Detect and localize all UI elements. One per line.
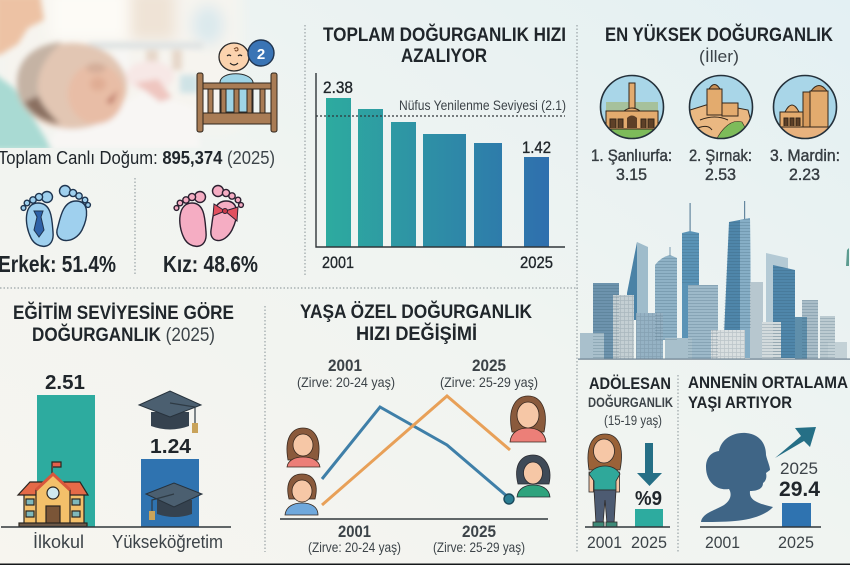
icon: Mardin xyxy=(774,76,837,140)
bar 2025 xyxy=(782,503,811,527)
text: total live births: Toplam Canlı Doğum: 895,374 (2025) xyxy=(0,148,275,168)
bottom labels: 2001 xyxy=(338,522,371,541)
icon: graduation cap on bar xyxy=(146,483,202,520)
text: female share: Kız: 48.6% xyxy=(163,251,258,277)
axis labels: 2001 xyxy=(587,533,622,552)
axis labels: 2025 xyxy=(631,533,667,552)
heading line two: YAŞI ARTIYOR xyxy=(688,393,792,412)
panel: highest fertility provinces xyxy=(591,23,840,184)
subheading: (İller) xyxy=(699,47,739,66)
value: 29.4 xyxy=(779,478,820,501)
province labels: 3.15 xyxy=(616,165,647,184)
axis labels: Yükseköğretim xyxy=(112,531,223,552)
icon: pink baby feet xyxy=(174,186,243,246)
top labels: 2025 xyxy=(472,356,506,375)
value labels: 2.51 xyxy=(45,372,85,394)
panel: adolescent fertility xyxy=(585,374,673,552)
age range: (15-19 yaş) xyxy=(604,413,662,428)
icon: school xyxy=(18,462,88,526)
value labels: 1.24 xyxy=(150,436,192,458)
province labels: 3. Mardin: xyxy=(770,146,840,165)
bar 2025 xyxy=(635,509,663,527)
province labels: 2. Şırnak: xyxy=(689,146,752,165)
heading: TOPLAM DOĞURGANLIK HIZI xyxy=(323,23,566,46)
value labels xyxy=(45,372,192,458)
icon: woman upper right xyxy=(510,396,546,442)
illustration: city skyline xyxy=(578,201,850,360)
value xyxy=(779,459,820,501)
top labels xyxy=(297,356,538,390)
axis labels xyxy=(705,533,814,552)
bottom labels: 2025 xyxy=(462,522,496,541)
bar chart: 1.42 xyxy=(522,138,551,157)
heading: YAŞA ÖZEL DOĞURGANLIK xyxy=(300,301,532,323)
icon: baby in crib with badge 2: 2 xyxy=(257,46,265,63)
subheading: DOĞURGANLIK xyxy=(588,395,673,410)
province labels: 1. Şanlıurfa: xyxy=(591,146,672,165)
axis labels: İlkokul xyxy=(33,531,84,552)
heading line two: AZALIYOR xyxy=(401,45,487,67)
bottom labels xyxy=(308,522,525,555)
bar chart: 2025 xyxy=(520,253,553,272)
axis labels: 2001 xyxy=(705,533,740,552)
heading line two: DOĞURGANLIK (2025) xyxy=(32,324,215,346)
text: male share: Erkek: 51.4% xyxy=(0,251,116,277)
bar chart xyxy=(316,73,566,272)
panel: fertility by education xyxy=(1,302,234,552)
top labels: (Zirve: 25-29 yaş) xyxy=(440,374,538,390)
axis labels xyxy=(587,533,667,552)
icon: blue baby feet xyxy=(21,186,90,246)
bar chart: 2001 xyxy=(322,253,354,272)
bottom labels: (Zirve: 20-24 yaş) xyxy=(308,539,401,555)
bar chart: Nüfus Yenilenme Seviyesi (2.1) xyxy=(399,98,566,113)
arrow: increase xyxy=(775,427,816,458)
icon: graduation cap xyxy=(139,391,201,433)
line chart xyxy=(280,396,548,519)
axis labels: 2025 xyxy=(778,533,814,552)
icon: Şanlıurfa xyxy=(600,76,664,140)
panel: total fertility rate xyxy=(316,23,566,272)
value: 2025 xyxy=(780,459,818,478)
province labels xyxy=(591,146,840,184)
icon: teenage girl xyxy=(588,434,622,527)
heading: EĞİTİM SEVİYESİNE GÖRE xyxy=(13,302,234,324)
heading line two: HIZI DEĞİŞİMİ xyxy=(356,323,477,345)
panel: age-specific fertility change xyxy=(280,301,550,555)
axis labels xyxy=(33,531,223,552)
top labels: 2001 xyxy=(328,356,362,375)
panel: mother's average age xyxy=(688,373,848,552)
icon: woman lower left xyxy=(285,474,318,515)
province labels: 2.53 xyxy=(705,165,736,184)
bar chart: 2.38 xyxy=(323,78,353,97)
top labels: (Zirve: 20-24 yaş) xyxy=(297,374,395,390)
bar: primary school xyxy=(37,395,95,527)
photo: newborn baby with mother xyxy=(0,0,240,150)
icon: woman lower right xyxy=(517,455,550,497)
decoration: plant at right edge xyxy=(846,248,849,266)
bar: higher education xyxy=(141,459,199,527)
province labels: 2.23 xyxy=(789,165,820,184)
icon: Şırnak xyxy=(690,76,756,140)
icon: mother silhouette xyxy=(701,433,773,522)
arrow: decrease xyxy=(637,443,662,486)
bottom labels: (Zirve: 25-29 yaş) xyxy=(433,539,525,555)
value: %9 xyxy=(635,488,662,510)
icon: baby in crib with badge 2 xyxy=(197,40,277,132)
heading: ADÖLESAN xyxy=(589,374,671,393)
icon: woman top left xyxy=(287,428,320,467)
